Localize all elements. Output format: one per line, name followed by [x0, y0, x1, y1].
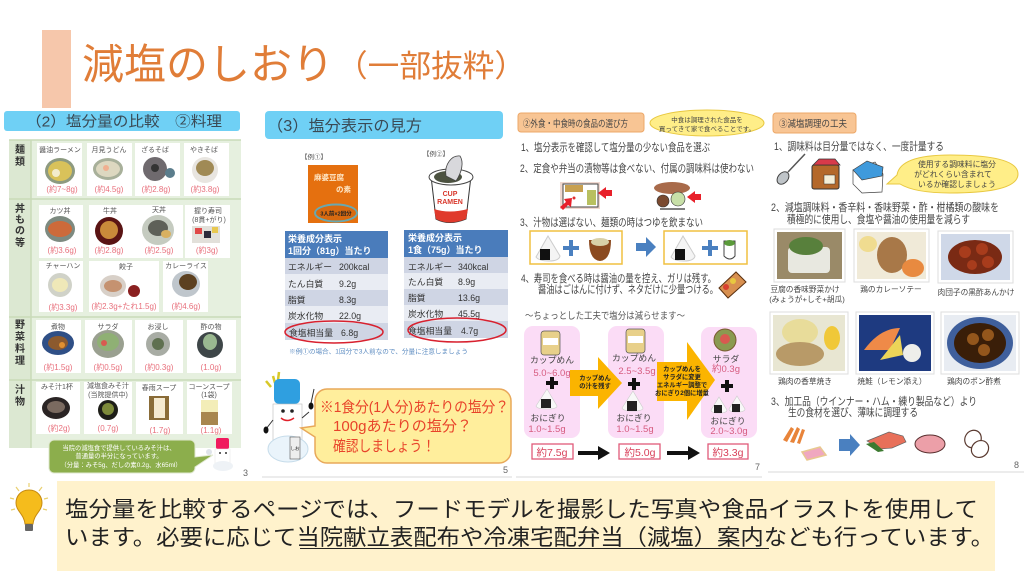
callout: miso soup note: （分量：みそ5g、だしの素0.2g、水65ml）: [60, 460, 182, 469]
panel: low-salt cooking tips: [769, 113, 1019, 470]
flow column 1: カップめん: [530, 355, 574, 365]
salt amounts: (約2.8g): [142, 184, 171, 194]
icon: sushi tray: [719, 272, 746, 298]
page number: 5: [503, 465, 508, 475]
nutrition table 2: 340kcal: [458, 262, 488, 272]
nutrition table 1: 22.0g: [339, 311, 361, 321]
callout: check salt per serving: ※1食分(1人分)あたりの塩分？: [320, 399, 509, 416]
category labels: 物: [15, 395, 25, 408]
dish names: 減塩食みそ汁: [87, 381, 129, 390]
callout: nakashoku definition: 買ってきて家で食べることです。: [659, 124, 755, 133]
icon: mapo tofu package: の素: [336, 184, 351, 194]
tip 2: 積極的に使用し、食塩や醤油の使用量を減らす: [787, 212, 970, 226]
dish names: 煮物: [51, 322, 65, 331]
salt amounts: (約1.5g): [44, 362, 73, 372]
nutrition table 1: たん白質: [288, 278, 323, 289]
dish names: やきそば: [190, 145, 218, 154]
tip 2: [771, 200, 999, 226]
icon: salt shaker mascot: [206, 438, 233, 471]
nutrition table 1: [285, 231, 388, 340]
example 2 label: 【例②】: [423, 149, 449, 158]
note: ※例①の場合、1回分で3人前なので、分量に注意しましょう: [289, 346, 468, 356]
callout: miso soup note: 普通量の半分になっています。: [75, 451, 163, 460]
dish names: カレーライス: [165, 262, 207, 270]
callout: check seasoning salt: いるか確認しましょう: [918, 179, 996, 189]
category labels: も: [15, 214, 25, 226]
icon: mapo tofu package: 3人前×2回分: [320, 210, 352, 218]
dish names: みそ汁1杯: [41, 382, 73, 391]
arrows between totals: [578, 446, 700, 460]
salt amounts: (1.1g): [201, 426, 222, 435]
tip 3: 3、加工品（ウインナー・ハム・練り製品など）より: [771, 394, 977, 408]
category labels: 汁: [15, 383, 25, 396]
nutrition table 2: 栄養成分表示: [408, 232, 462, 243]
nutrition table 1: エネルギー: [288, 262, 332, 272]
caption: tofu: [769, 284, 845, 304]
flow column 2: おにぎり: [616, 412, 652, 423]
food cards: [36, 143, 236, 434]
dish names: 牛丼: [103, 206, 117, 215]
icon: fresh fish: [866, 432, 906, 452]
dish names: 餃子: [119, 263, 133, 271]
callout: check seasoning salt: 使用する調味料に塩分: [918, 159, 996, 169]
panel: choosing eat-out food: [518, 110, 764, 472]
photo: grilled salmon: [856, 312, 934, 374]
nutrition table 2: 1食（75g）当たり: [408, 244, 483, 255]
icon: salt container: [853, 161, 883, 193]
heading: salt comparison: [4, 111, 240, 131]
dish names: 酢の物: [200, 322, 222, 331]
callout: check seasoning salt: [887, 155, 1018, 193]
icon: cup ramen: RAMEN: [437, 199, 463, 206]
dish names: 天丼: [152, 205, 166, 214]
salt amounts: (約7~8g): [46, 184, 78, 194]
callout: summary text box: 塩分量を比較するページでは、フードモデルを撮影した写真や食品イラストを使用して: [65, 497, 978, 522]
nutrition table 1: 食塩相当量: [289, 327, 333, 338]
dish names: [39, 145, 230, 399]
heading: small tips: ～ちょっとした工夫で塩分は減らせます～: [525, 310, 685, 322]
total values: 約3.3g: [713, 446, 744, 459]
dish names: (1袋): [201, 390, 217, 399]
heading: salt labels: [265, 111, 503, 139]
panel separators: [262, 472, 1024, 477]
icon: lightbulb: [10, 483, 48, 531]
callout: check salt per serving: [301, 389, 511, 463]
page number: 8: [1014, 460, 1019, 470]
flow column 1: おにぎり: [530, 412, 566, 423]
salt amounts: (約3.8g): [191, 184, 220, 194]
total values: 約7.5g: [537, 446, 568, 459]
icon: processed foods: [783, 427, 826, 460]
heading: salt labels: （3）塩分表示の見方: [267, 117, 422, 135]
arrow: [839, 434, 860, 456]
callout: check seasoning salt: がどれくらい含まれて: [914, 169, 992, 179]
icon: measuring spoon: [775, 154, 805, 187]
dish names: サラダ: [98, 322, 118, 331]
tip 3: [771, 394, 977, 419]
dish names: 醤油ラーメン: [39, 145, 81, 154]
icon: cup ramen: CUP: [443, 191, 458, 198]
callout: check salt per serving: 100gあたりの塩分？: [333, 418, 472, 435]
nutrition table 1: 1回分（81g）当たり: [288, 245, 372, 256]
total values: 約5.0g: [625, 446, 656, 459]
tip 4: 醤油はごはんに付けず、ネタだけに少量つける。: [538, 282, 718, 296]
category labels: 菜: [15, 330, 25, 343]
arrow: drink less soup: [570, 357, 622, 409]
callout: summary text box: います。必要に応じて当院献立表配布や冷凍宅配弁当（減塩）案内なども行っています。: [65, 525, 994, 550]
heading: cooking: [773, 113, 856, 133]
nutrition table 2: 食塩相当量: [408, 325, 452, 336]
salt amounts: [44, 184, 222, 435]
dish names: ざるそば: [141, 145, 169, 154]
nutrition table 1: 200kcal: [339, 262, 369, 272]
callout: miso soup note: [49, 440, 213, 473]
total values: [537, 446, 744, 459]
salt amounts: (約2.8g): [95, 245, 124, 255]
flow column 3: おにぎり: [710, 415, 746, 426]
photo: tofu: [774, 229, 845, 282]
dish names: 月見うどん: [92, 146, 126, 154]
page number: 3: [243, 468, 248, 478]
comparison table background: [9, 140, 241, 448]
caption: tofu: (みょうが+しそ+胡瓜): [769, 294, 845, 304]
dish photos: [42, 157, 223, 425]
flow column 2: [608, 326, 664, 438]
photo: meatballs: [938, 231, 1013, 283]
dish names: 握り寿司: [194, 206, 222, 215]
flow column 3: [701, 327, 757, 438]
salt amounts: (約4.6g): [172, 301, 201, 311]
callout: nakashoku definition: 中食は調理された食品を: [671, 115, 743, 124]
category labels: 等: [15, 236, 25, 249]
arrow: change to salad: エネルギー調整で: [657, 380, 707, 389]
photo: chicken ponzu: [941, 312, 1019, 374]
nutrition table 2: エネルギー: [408, 262, 452, 272]
nutrition table 2: [404, 230, 508, 338]
dish names: チャーハン: [46, 262, 80, 270]
title: 減塩のしおり: [82, 41, 334, 88]
dish names: 春雨スープ: [142, 383, 176, 392]
flow column 2: 2.5~3.5g: [618, 366, 656, 377]
nutrition table 2: 13.6g: [458, 293, 480, 303]
salt amounts: (約2.5g): [145, 245, 174, 255]
panel: how to read salt labels: [264, 111, 511, 475]
example 1 label: 【例①】: [301, 152, 327, 161]
nutrition table 1: 6.8g: [341, 328, 358, 338]
tip 4: [521, 271, 718, 296]
arrow: change to salad: [655, 342, 715, 420]
nutrition table 1: 8.3g: [339, 295, 356, 305]
tip 1: 1、調味料は目分量ではなく、一度計量する: [774, 139, 944, 153]
caption: meatballs: 肉団子の黒酢あんかけ: [938, 287, 1015, 297]
arrow: drink less soup: カップめん: [579, 374, 611, 382]
heading: salt comparison: （2）塩分量の比較 ②料理: [26, 114, 223, 130]
dish names: コーンスープ: [188, 383, 230, 391]
icon: salt mascot: [264, 372, 314, 462]
tip 4: 4、寿司を食べる時は醤油の量を控え、ガリは残す。: [521, 271, 716, 285]
heading: eat-out: [518, 113, 644, 132]
flow column 2: 1.0~1.5g: [616, 424, 654, 435]
flow column 3: サラダ: [713, 353, 739, 364]
arrow: drink less soup: の汁を残す: [579, 381, 611, 390]
icon: miso container: [812, 159, 840, 189]
icon: eggs: [962, 427, 992, 461]
category labels: [15, 143, 25, 408]
salt amounts: (約3.6g): [48, 245, 77, 255]
nutrition table 2: 8.9g: [458, 277, 475, 287]
icon: mapo tofu package: [308, 165, 358, 223]
nutrition table 2: 4.7g: [461, 326, 478, 336]
category labels: 類: [15, 155, 25, 168]
nutrition table 2: 45.5g: [458, 309, 480, 319]
salt amounts: (0.7g): [98, 424, 119, 433]
tip 3: 3、汁物は選ばない、麺類の時はつゆを飲まない: [520, 215, 703, 229]
heading: eat-out: ②外食・中食時の食品の選び方: [523, 118, 628, 130]
nutrition table 2: たん白質: [408, 276, 443, 287]
category labels: 理: [15, 355, 25, 367]
salt amounts: (約0.3g): [145, 362, 174, 372]
icon: rice ball plus tea: [664, 231, 747, 264]
title: [82, 41, 526, 88]
panel: salt comparison dishes: [4, 111, 248, 478]
tip 3: 生の食材を選び、薄味に調理する: [788, 405, 918, 419]
category labels: 丼: [15, 202, 25, 215]
caption: chicken curry saute: 鶏のカレーソテー: [860, 284, 922, 294]
category labels: の: [15, 226, 25, 237]
salt highlight ellipses: [285, 318, 506, 343]
callout: nakashoku definition: [650, 110, 764, 136]
caption: chicken ponzu: 鶏肉のポン酢煮: [947, 376, 1001, 386]
callout: summary text box: [57, 481, 995, 571]
tip 1: 1、塩分表示を確認して塩分量の少ない食品を選ぶ: [521, 140, 710, 154]
page number: 7: [755, 462, 760, 472]
photo: herb chicken: [770, 312, 848, 374]
nutrition table 2: 脂質: [408, 292, 426, 303]
callout: miso soup note: 当院の減塩食で提供しているみそ汁は、: [62, 443, 176, 452]
caption: herb chicken: 鶏肉の香草焼き: [778, 376, 832, 386]
arrow: [636, 237, 656, 257]
dish names: (8貫+がり): [192, 215, 226, 224]
icon: salt mascot: しお: [290, 445, 300, 451]
icon: set meal: [654, 182, 701, 209]
flow column 3: 約0.3g: [712, 363, 740, 375]
nutrition table 1: 栄養成分表示: [288, 233, 342, 244]
dish names: (当院提供中): [88, 390, 128, 399]
title accent bar: [42, 30, 71, 108]
heading: cooking: ③減塩調理の工夫: [779, 118, 847, 130]
arrow: change to salad: おにぎり2個に増量: [655, 388, 710, 397]
dish names: カツ丼: [50, 206, 70, 215]
icon: bento box: [560, 182, 612, 210]
icon: rice ball plus miso soup: [530, 231, 622, 264]
salt amounts: (約3g): [196, 245, 218, 255]
salt amounts: (1.0g): [201, 363, 222, 372]
flow column 1: 5.0~6.0g: [533, 368, 571, 379]
photo: chicken curry saute: [854, 229, 929, 282]
salt amounts: (約3.3g): [49, 302, 78, 312]
icon: cup ramen: [429, 156, 473, 222]
callout: check salt per serving: 確認しましょう！: [333, 438, 435, 455]
nutrition table 1: 脂質: [288, 294, 306, 305]
icon: meat: [915, 435, 945, 453]
flow column 3: 2.0~3.0g: [710, 426, 748, 437]
salt amounts: (約4.5g): [95, 184, 124, 194]
category labels: 麺: [15, 143, 25, 156]
flow column 2: カップめん: [612, 353, 656, 363]
caption: grilled salmon: 焼鮭（レモン添え）: [857, 376, 927, 386]
salt amounts: (約0.5g): [94, 362, 123, 372]
category labels: 料: [15, 342, 25, 355]
caption: tofu: 豆腐の香味野菜かけ: [770, 284, 840, 294]
nutrition table 2: 炭水化物: [408, 308, 443, 319]
salt amounts: (約2.3g+たれ1.5g): [91, 301, 157, 311]
arrow: change to salad: カップめんを: [663, 365, 701, 373]
flow column 1: [524, 326, 580, 438]
salt amounts: (1.7g): [150, 426, 171, 435]
dish names: お浸し: [148, 322, 168, 331]
nutrition table 1: 9.2g: [339, 279, 356, 289]
icon: mapo tofu package: 麻婆豆腐: [314, 172, 344, 182]
salt amounts: (約2g): [48, 423, 70, 433]
nutrition table 1: 炭水化物: [288, 310, 323, 321]
title: （一部抜粋）: [336, 49, 526, 84]
category labels: 野: [15, 318, 25, 331]
tip 2: 2、定食や弁当の漬物等は食べない、付属の調味料は使わない: [520, 161, 754, 175]
totals: [532, 444, 748, 459]
arrow: change to salad: サラダに変更: [663, 372, 702, 381]
flow column 1: 1.0~1.5g: [528, 424, 566, 435]
